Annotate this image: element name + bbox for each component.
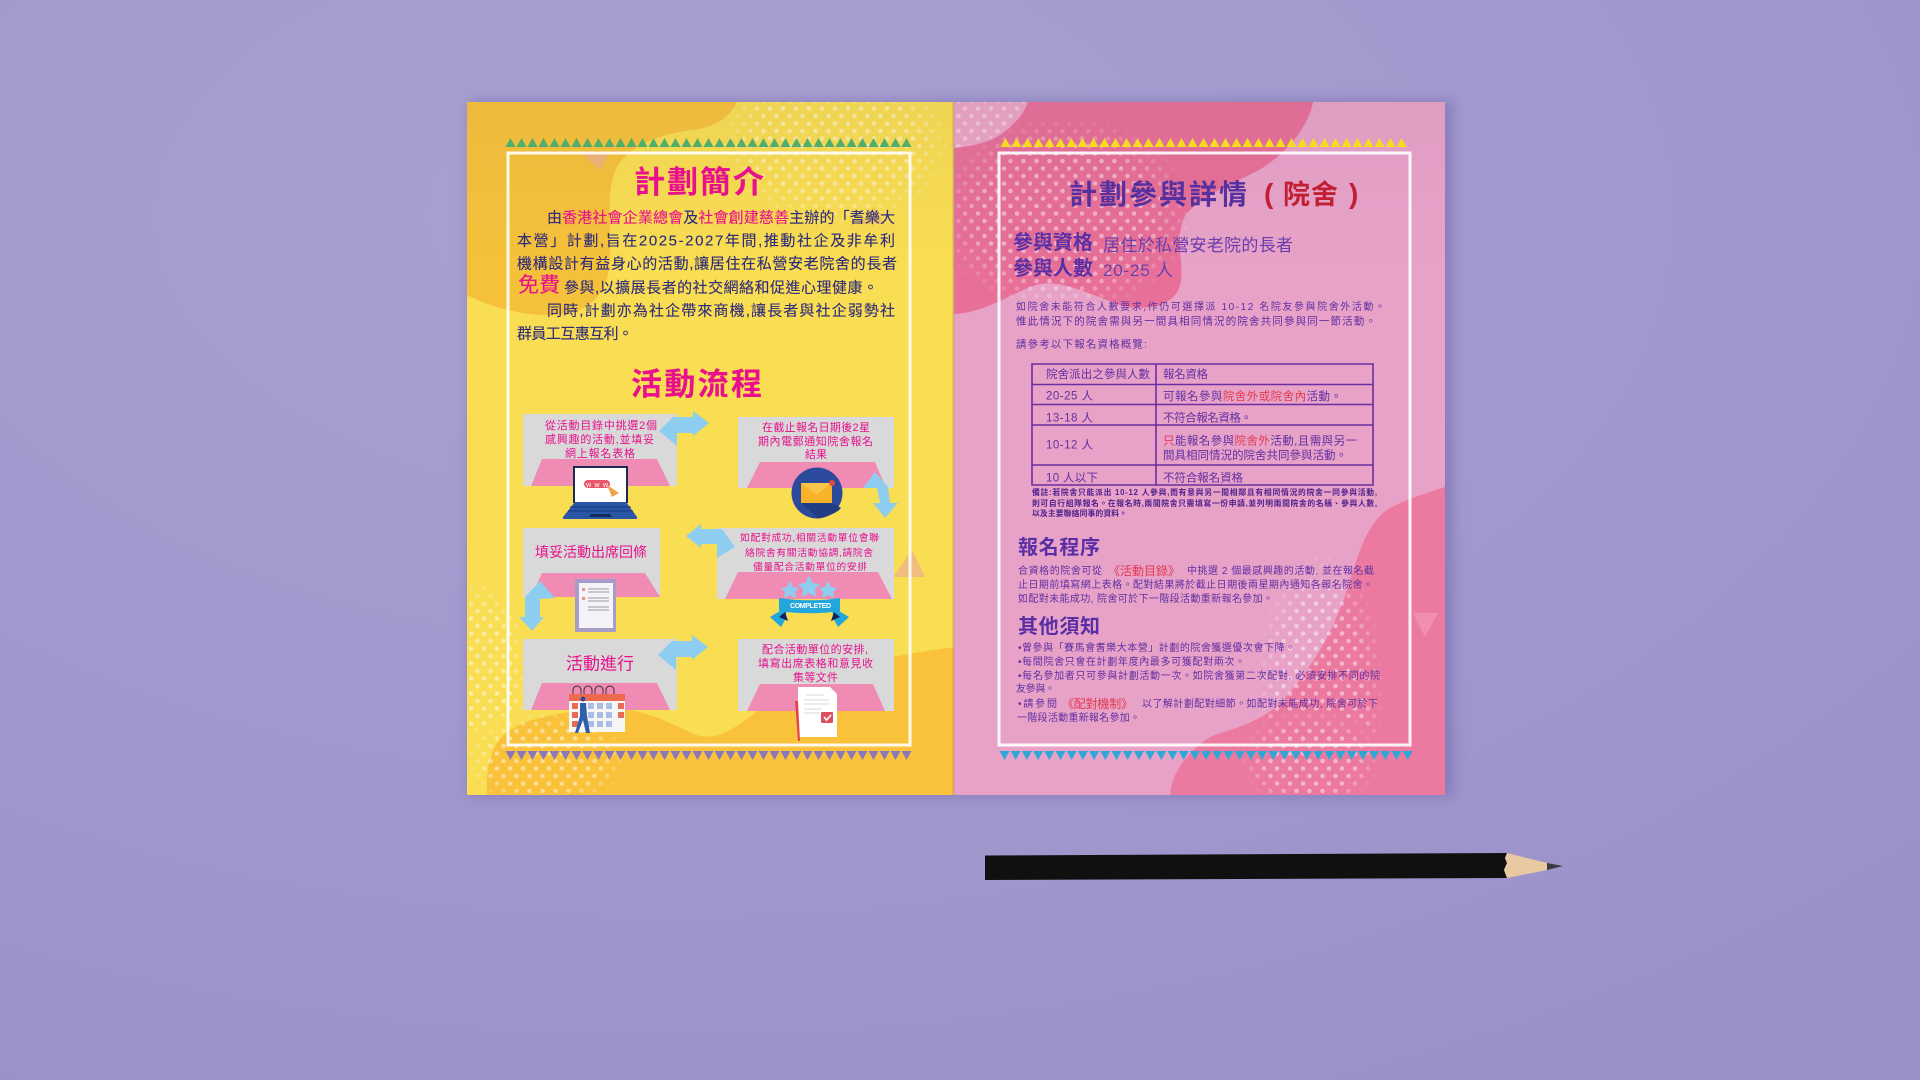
eligibility table: 10-12 人 [1046, 438, 1094, 452]
registration procedure text: 止日期前填寫網上表格。配對結果將於截止日期後兩星期內通知各報名院舍。 [1018, 578, 1373, 591]
eligibility table: 20-25 人 [1046, 390, 1094, 402]
intro text block: 同時,計劃亦為社企帶來商機,讓長者與社企弱勢社 [547, 302, 895, 320]
explanatory paragraph [1016, 300, 1385, 350]
right title: 計劃參與詳情(院舍): ( [1264, 178, 1274, 209]
intro text block [517, 209, 897, 343]
registration procedure text: 如配對未能成功, 院舍可於下一階段活動重新報名參加。 [1018, 592, 1273, 605]
other notes list: •每間院舍只會在計劃年度內最多可獲配對兩次。 [1018, 655, 1245, 668]
intro text block: 免費 [518, 274, 560, 297]
right page: pink [954, 102, 1445, 795]
other notes list: •曾參與「賽馬會耆樂大本營」計劃的院舍獲選優次會下降。 [1018, 641, 1295, 654]
left page: yellow [467, 102, 954, 795]
eligibility summary: 居住於私營安老院的長者 [1103, 236, 1293, 255]
registration procedure text: 《活動目錄》 [1108, 564, 1180, 578]
right title: 計劃參與詳情(院舍): ) [1349, 178, 1358, 209]
left triangle border bottom [505, 751, 912, 760]
intro text block: 機構設計有益身心的活動,讓居住在私營安老院舍的長者 [517, 255, 897, 273]
spine between pages [952, 102, 954, 795]
eligibility table: 10 人以下 [1046, 472, 1098, 484]
table footnote: 則可自行組隊報名。在報名時,兩間院舍只需填寫一份申請,並列明兩間院舍的名稱、參與人數, [1032, 498, 1377, 508]
other notes list: •每名參加者只可參與計劃活動一次。如院舍獲第二次配對, 必須安排不同的院 [1018, 669, 1380, 682]
step 5: activity runs [523, 639, 677, 733]
left white frame [508, 153, 910, 745]
step 1: choose activities: 網上報名表格 [565, 446, 635, 460]
booklet shadow [469, 100, 1453, 797]
eligibility table: 只能報名參與院舍外活動,且需與另一 [1163, 434, 1358, 448]
intro text block: 參與,以擴展長者的社交網絡和促進心理健康。 [564, 279, 878, 297]
eligibility summary: 參與資格 [1013, 230, 1093, 254]
right white frame [999, 153, 1410, 745]
table footnote: 以及主要聯絡同事的資料。 [1032, 508, 1127, 518]
pencil [985, 853, 1563, 880]
right triangle border top [1000, 138, 1408, 147]
step 4: reply slip [523, 528, 660, 632]
intro text block: 本營」計劃,旨在2025-2027年間,推動社企及非牟利 [517, 232, 895, 250]
step 3: matching coordination: 儘量配合活動單位的安排 [753, 560, 867, 573]
other notes list: 友參與。 [1016, 682, 1055, 695]
eligibility table: 不符合報名資格 [1163, 470, 1244, 484]
icon: envelope [792, 468, 842, 518]
step 6: feedback documents: 集等文件 [793, 670, 838, 684]
arrow: step 1 to step 2 [659, 411, 709, 446]
other notes list [1016, 641, 1380, 724]
step 2: email notification [738, 417, 894, 518]
eligibility table: 院舍派出之參與人數 [1046, 367, 1150, 381]
icon: document with check [795, 687, 837, 741]
left triangle border top [505, 138, 912, 147]
registration procedure text [1018, 564, 1374, 605]
eligibility summary [1013, 230, 1293, 280]
step 5: activity runs: 活動進行 [566, 654, 634, 674]
step 2: email notification: 期內電郵通知院舍報名 [758, 434, 873, 448]
other notes list: 以了解計劃配對細節。如配對未能成功, 院舍可於下 [1142, 697, 1378, 710]
eligibility table: 可報名參與院舍外或院舍內活動。 [1163, 389, 1342, 403]
eligibility table: 13-18 人 [1046, 412, 1094, 424]
icon: laptop: www [585, 482, 609, 489]
heading: 其他須知: 其他須知 [1018, 615, 1100, 638]
step 1: choose activities [523, 414, 677, 519]
heading: 報名程序: 報名程序 [1018, 535, 1100, 559]
step 6: feedback documents: 配合活動單位的安排, [762, 642, 868, 656]
step 3: matching coordination: 絡院舍有關活動協調,請院舍 [745, 546, 873, 559]
other notes list: 一階段活動重新報名參加。 [1017, 711, 1140, 724]
step 3: matching coordination [717, 528, 894, 627]
other notes list: 《配對機制》 [1062, 696, 1133, 711]
intro text block: 群員工互惠互利。 [517, 326, 633, 343]
step 3: matching coordination: 如配對成功,相關活動單位會聯 [740, 531, 879, 544]
arrow: step 2 to step 3 [863, 472, 898, 518]
eligibility table: 間具相同情況的院舍共同參與活動。 [1163, 448, 1347, 462]
explanatory paragraph: 惟此情況下的院舍需與另一間具相同情況的院舍共同參與同一節活動。 [1016, 314, 1376, 328]
other notes list: •請參閱 [1018, 697, 1057, 710]
table footnote: 備註:若院舍只能派出 10-12 人參與,而有意與另一間相鄰且有相同情況的院舍一同參與活動, [1032, 487, 1377, 497]
step 6: feedback documents [738, 639, 894, 741]
right title: 計劃參與詳情(院舍): 院舍 [1283, 179, 1338, 210]
step 1: choose activities: 感興趣的活動,並填妥 [545, 432, 654, 446]
eligibility table [1032, 364, 1373, 485]
icon: completed badge [770, 575, 849, 627]
step 2: email notification: 在截止報名日期後2星 [762, 420, 870, 434]
registration procedure text: 中挑選 2 個最感興趣的活動, 並在報名截 [1187, 564, 1374, 577]
eligibility summary: 20-25 人 [1103, 261, 1173, 280]
explanatory paragraph: 請參考以下報名資格概覽: [1016, 338, 1147, 350]
explanatory paragraph: 如院舍未能符合人數要求,作仍可選擇派 10-12 名院友參與院舍外活動。 [1016, 300, 1385, 313]
table footnote [1032, 487, 1377, 518]
arrow: step 5 to step 6 [658, 635, 708, 670]
icon: checklist document [575, 579, 616, 632]
eligibility table: 報名資格 [1163, 367, 1208, 381]
icon: laptop [563, 466, 637, 519]
step 2: email notification: 結果 [805, 447, 827, 461]
step 4: reply slip: 填妥活動出席回條 [535, 544, 647, 560]
right title: 計劃參與詳情(院舍) [1069, 178, 1358, 210]
intro text block: 由香港社會企業總會及社會創建慈善主辦的「耆樂大 [547, 209, 895, 227]
right title: 計劃參與詳情(院舍): 計劃參與詳情 [1069, 179, 1247, 210]
arrow: step 4 to step 5 [519, 581, 555, 631]
heading: 計劃簡介: 計劃簡介 [634, 165, 764, 200]
right triangle border bottom [999, 751, 1413, 760]
step 6: feedback documents: 填寫出席表格和意見收 [758, 656, 873, 670]
eligibility table: 不符合報名資格。 [1163, 410, 1252, 424]
icon: calendar [569, 686, 625, 733]
heading: 活動流程: 活動流程 [631, 367, 762, 402]
registration procedure text: 合資格的院舍可從 [1018, 564, 1102, 577]
icon: completed badge: COMPLETED [790, 603, 831, 610]
eligibility summary: 參與人數 [1013, 256, 1093, 280]
arrow: step 3 to step 4 [686, 524, 735, 558]
step 1: choose activities: 從活動目錄中挑選2個 [545, 418, 657, 432]
